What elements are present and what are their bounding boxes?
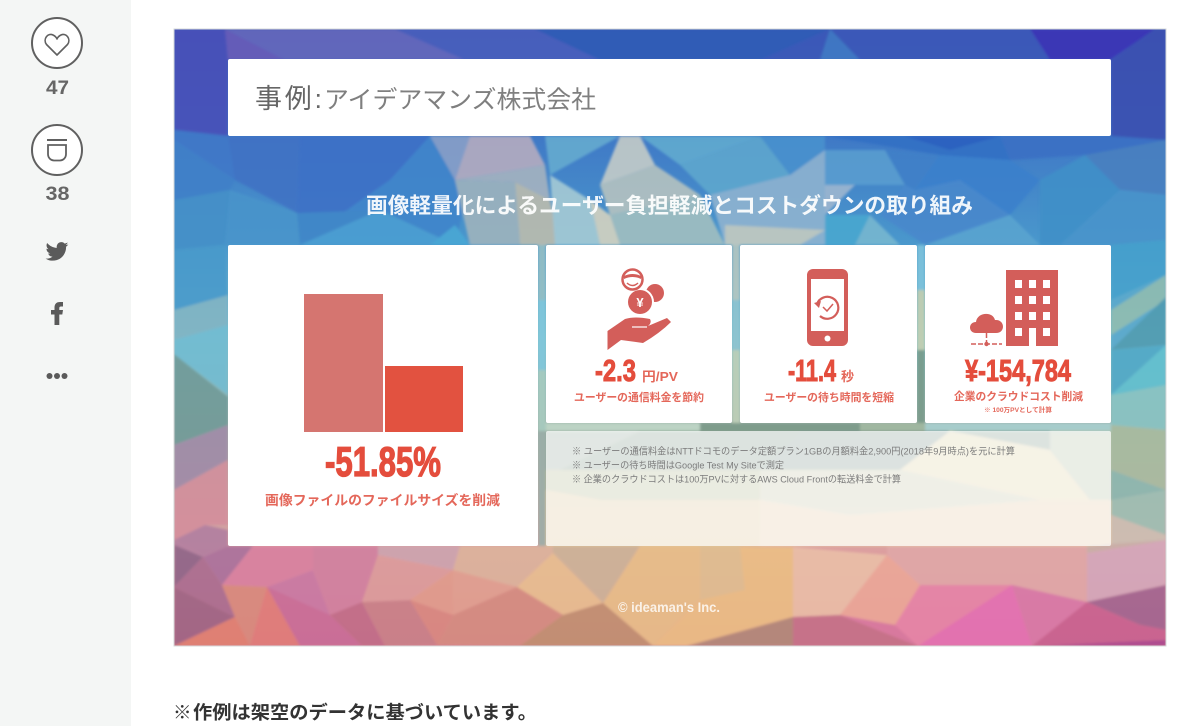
panel: title bar: 事例: <box>255 84 322 114</box>
value: 円/PV <box>642 369 678 384</box>
value: -51.85% <box>325 438 441 485</box>
icon: hand with coin and face: ¥ <box>636 295 644 310</box>
icon: more dots <box>46 373 68 379</box>
pocket button with count <box>32 125 82 205</box>
icon: facebook <box>51 302 63 325</box>
bottom band <box>174 540 198 555</box>
panel: title bar <box>228 59 1111 136</box>
pocket button with count: 38 <box>46 184 70 205</box>
image border <box>174 29 1166 646</box>
note lines <box>572 446 1015 486</box>
panel: waiting time <box>740 245 917 423</box>
footer credit: © ideaman's Inc. <box>618 600 720 615</box>
note lines: ※ 企業のクラウドコストは100万PVに対するAWS Cloud Frontの転送料金で計算 <box>572 474 901 486</box>
low-poly background image <box>174 29 1166 646</box>
top band <box>174 29 228 136</box>
value: -2.3 <box>595 353 636 388</box>
caption: 画像ファイルのファイルサイズを削減 <box>265 492 500 508</box>
value: 秒 <box>841 369 854 384</box>
bar chart <box>304 294 463 432</box>
bottom note: 作例は架空のデータに基づいています。 <box>193 702 537 723</box>
value: -11.4 <box>788 353 837 388</box>
value: ¥-154,784 <box>965 353 1072 388</box>
sidebar background <box>0 0 131 726</box>
note lines: ※ ユーザーの待ち時間はGoogle Test My Siteで測定 <box>572 460 784 472</box>
panel: cloud cost <box>925 245 1111 423</box>
upper band left <box>216 165 234 177</box>
icon: building and cloud <box>970 270 1058 346</box>
bottom note: ※ <box>173 702 192 723</box>
icon: phone with clock <box>807 269 848 346</box>
panel: notes <box>546 431 1111 546</box>
caption: ユーザーの待ち時間を短縮 <box>764 390 894 404</box>
icon: hand with coin and face <box>608 270 671 350</box>
like button with count: 47 <box>46 78 69 99</box>
caption: ユーザーの通信料金を節約 <box>574 390 704 404</box>
small note: ※ 100万PVとして計算 <box>984 405 1052 414</box>
panel: communication cost <box>546 245 732 423</box>
heading: 画像軽量化によるユーザー負担軽減とコストダウンの取り組み <box>366 193 973 218</box>
strips between cards <box>538 245 546 300</box>
caption: 企業のクラウドコスト削減 <box>954 389 1083 403</box>
like button with count <box>32 18 82 99</box>
icon: twitter <box>46 242 68 261</box>
left column <box>174 260 228 310</box>
pale peaks <box>430 136 470 180</box>
note lines: ※ ユーザーの通信料金はNTTドコモのデータ定額プラン1GBの月額料金2,900円(2018年9月時点)を元に計算 <box>572 446 1015 458</box>
panel: title bar: アイデアマンズ株式会社 <box>324 86 596 114</box>
panel: file size reduction <box>228 245 538 546</box>
underlay of note panel <box>565 430 1049 470</box>
